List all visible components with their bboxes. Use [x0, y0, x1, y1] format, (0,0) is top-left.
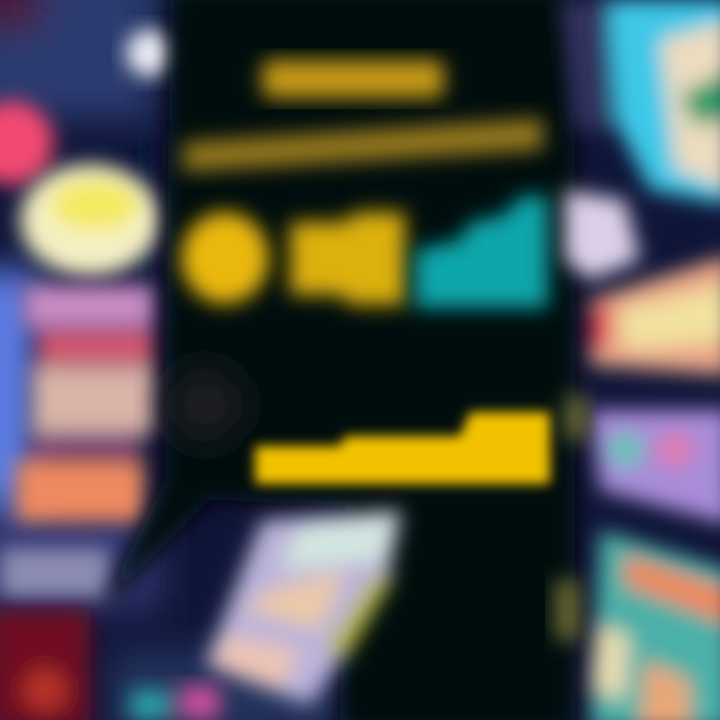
- panel: central black panel: [100, 0, 575, 720]
- panel: bottom-left small tiles: [130, 685, 220, 720]
- subheading bar: [183, 118, 543, 172]
- panel: left stacked strips: [0, 285, 156, 598]
- stat: yellow circle: [181, 212, 269, 304]
- heading bar: [262, 60, 444, 98]
- accent: olive marks: [555, 395, 587, 640]
- icon: yellow ellipse: [20, 164, 160, 276]
- callout: yellow bar: [255, 412, 550, 484]
- icon: white dot: [126, 29, 174, 77]
- stat: yellow figure: [290, 212, 405, 305]
- panel: right pink and yellow card: [590, 255, 720, 375]
- panel: left background: [0, 0, 340, 720]
- panel: right top cyan card: [560, 0, 720, 205]
- panel: right bottom teal card: [590, 530, 720, 720]
- panel: bottom tilted pastel card: [205, 510, 402, 705]
- panel: right lilac card: [590, 410, 720, 525]
- panel: bottom-left dark red block: [0, 610, 90, 720]
- chart: teal bars: [415, 196, 548, 308]
- panel: right middle lilac block: [565, 190, 640, 280]
- circle outline icon: [165, 365, 245, 445]
- icon: pink circle: [0, 101, 54, 185]
